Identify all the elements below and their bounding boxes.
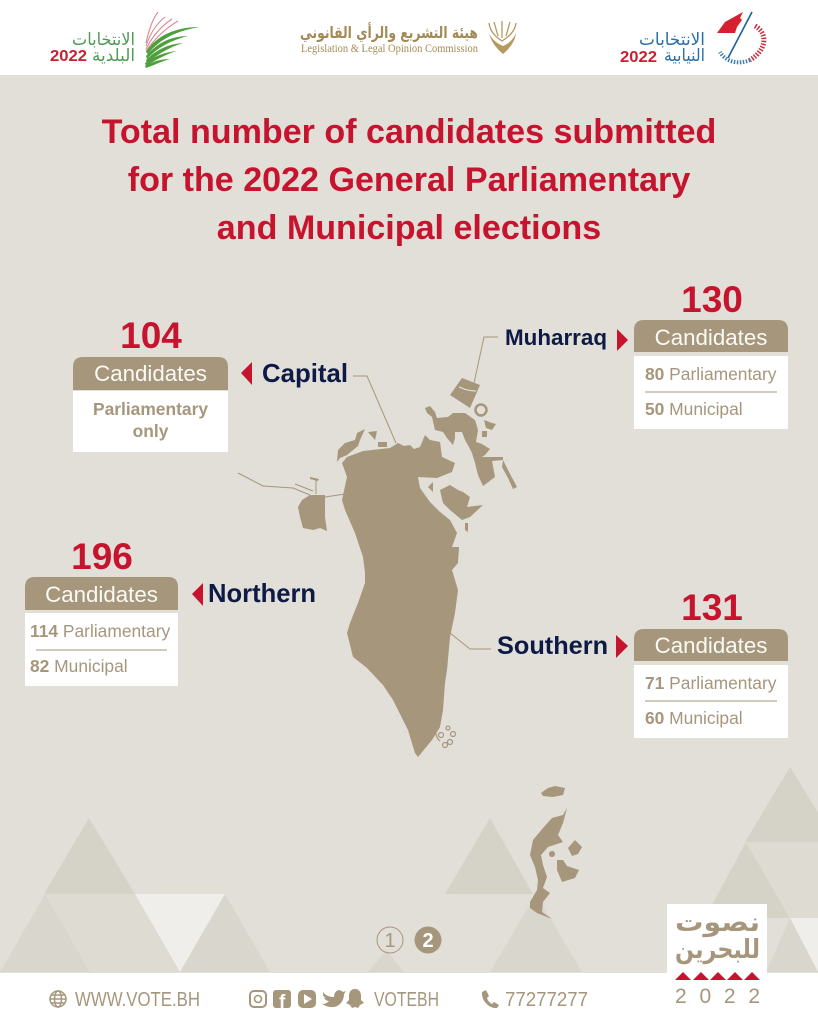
page indicator	[377, 926, 442, 954]
panel: Southern: 131	[681, 587, 743, 628]
panel: Capital	[73, 315, 228, 452]
logo: parliamentary elections	[620, 12, 764, 66]
panel: Southern: 71 Parliamentary	[645, 673, 777, 693]
logo: municipal elections: 2022	[50, 48, 87, 65]
panel: Northern: 82 Municipal	[30, 656, 128, 676]
title: and Municipal elections	[217, 209, 601, 247]
logo: Legislation and Legal Opinion Commission: هيئة التشريع والرأي القانوني	[300, 22, 478, 43]
panel: Southern: Candidates	[655, 633, 767, 658]
leader lines	[353, 337, 498, 649]
Muharraq island	[425, 406, 503, 486]
background triangles	[0, 767, 818, 972]
panel: Muharraq: 80 Parliamentary	[645, 364, 777, 384]
campaign logo: 2022: للبحرين	[675, 935, 760, 965]
page indicator: 2	[422, 930, 434, 952]
logo: parliamentary elections: 2022	[620, 49, 657, 66]
campaign logo: 2022	[667, 904, 767, 1024]
panel: Capital: only	[133, 421, 169, 441]
logo: parliamentary elections: الانتخابات	[639, 30, 705, 50]
campaign logo: 2022: 2022	[675, 985, 760, 1008]
panel: Muharraq: 50 Municipal	[645, 399, 743, 419]
logo: municipal elections	[50, 12, 200, 68]
panel: Southern: 60 Municipal	[645, 708, 743, 728]
panel: Northern	[25, 536, 178, 686]
main island	[342, 435, 459, 757]
footer band	[0, 973, 818, 1024]
logo: Legislation and Legal Opinion Commission	[300, 21, 516, 55]
southern tip reef	[436, 725, 456, 748]
panel: Capital: 104	[120, 315, 182, 356]
panel: Muharraq: 130	[681, 279, 743, 320]
Umm an Nasan island	[298, 495, 327, 531]
title: for the 2022 General Parliamentary	[128, 161, 690, 199]
causeway lines	[238, 473, 345, 497]
reclaimed islands	[450, 378, 480, 408]
label: Capital: Capital	[262, 360, 348, 388]
header band	[0, 0, 818, 75]
title	[102, 113, 716, 247]
panel: Muharraq	[634, 279, 788, 429]
logo: municipal elections: البلدية	[92, 46, 135, 66]
campaign logo: 2022: نصوت	[675, 908, 760, 938]
panel: Northern: 196	[71, 536, 133, 577]
logo: municipal elections: الانتخابات	[72, 30, 135, 50]
Hawar islands	[541, 786, 565, 797]
logo: parliamentary elections: النيابية	[664, 46, 705, 66]
panel: Capital: Candidates	[94, 361, 207, 386]
panel: Northern: Candidates	[45, 582, 158, 607]
Sitra and Nabih Saleh	[440, 485, 483, 520]
social icons and handle	[250, 989, 439, 1013]
website: WWW.VOTE.BH	[75, 989, 200, 1011]
social icons and handle: f	[279, 992, 286, 1013]
panel: Northern: 114 Parliamentary	[30, 621, 170, 641]
panel: Capital: Parliamentary	[93, 399, 208, 419]
page indicator: 1	[384, 930, 396, 952]
logo: Legislation and Legal Opinion Commission: Legislation & Legal Opinion Commission	[301, 41, 478, 55]
label: Northern: Northern	[208, 580, 316, 608]
label: Southern: Southern	[497, 632, 608, 660]
title: Total number of candidates submitted	[102, 113, 716, 151]
phone: 77277277	[505, 989, 588, 1011]
panel: Southern	[634, 587, 788, 738]
map of Bahrain	[238, 378, 582, 919]
label: Muharraq: Muharraq	[505, 325, 607, 350]
social icons and handle: VOTEBH	[374, 989, 439, 1011]
panel: Muharraq: Candidates	[655, 325, 767, 350]
